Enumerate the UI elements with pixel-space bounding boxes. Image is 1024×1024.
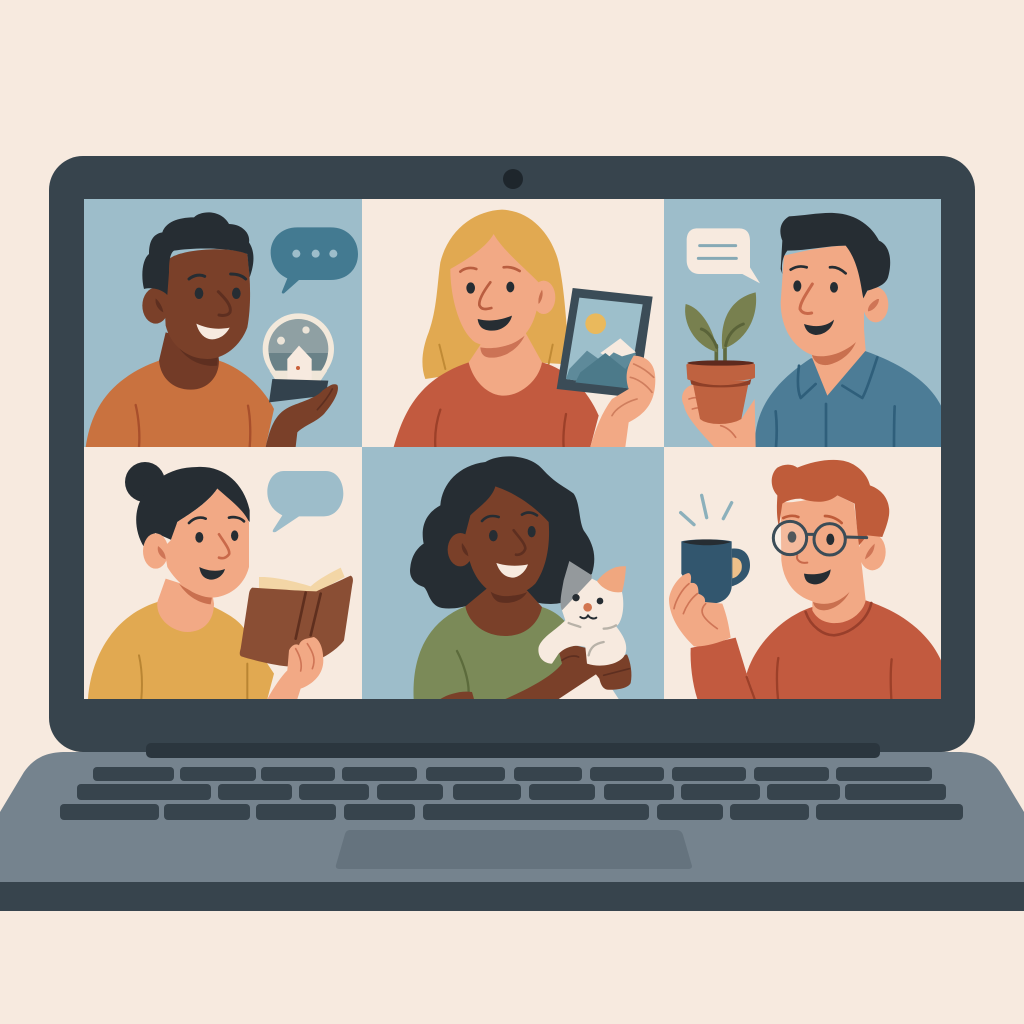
motion lines: [681, 495, 732, 525]
person 5: woman with cat: [410, 456, 631, 699]
face details: [791, 266, 846, 335]
face details: [783, 516, 842, 584]
mug: [681, 539, 750, 604]
potted plant: [685, 292, 756, 424]
keyboard: [60, 767, 963, 820]
face details: [189, 274, 246, 339]
ear: [863, 287, 888, 322]
person 4: woman with book: [88, 462, 353, 699]
neck: [157, 579, 214, 632]
shirt: [755, 351, 941, 447]
book: [240, 568, 353, 666]
cat lower body: [559, 664, 619, 699]
ear: [859, 534, 886, 570]
face details: [189, 517, 244, 580]
speech bubble: [687, 228, 760, 283]
face: [781, 246, 864, 356]
person 1: man with snow globe: [86, 212, 358, 447]
sweater: [86, 361, 274, 447]
front edge: [0, 882, 1024, 911]
long hair: [422, 210, 568, 379]
face: [450, 234, 539, 347]
trackpad: [336, 830, 692, 869]
ear: [143, 533, 168, 569]
hand: [590, 356, 655, 447]
sweater: [691, 600, 941, 699]
hair: [136, 467, 250, 547]
face: [781, 495, 862, 603]
arm and hand: [440, 645, 631, 699]
hair bun: [125, 462, 165, 502]
speech bubble: [267, 471, 343, 532]
neck: [812, 570, 866, 623]
webcam: [503, 169, 523, 189]
hinge: [146, 743, 880, 758]
laptop base: [0, 752, 1024, 911]
laptop lid: [49, 156, 975, 752]
face: [465, 486, 549, 596]
shirt lines: [776, 357, 895, 447]
speech bubble: [271, 227, 358, 293]
curly hair: [410, 456, 594, 608]
illustration: laptop video call: [0, 156, 1024, 911]
ear: [536, 280, 556, 314]
hair: [772, 460, 889, 545]
neck: [469, 332, 542, 396]
face: [164, 489, 249, 598]
hand: [266, 384, 338, 447]
ear: [448, 533, 473, 566]
person 3: man with plant: [682, 213, 941, 447]
cat: [538, 561, 626, 666]
neck: [159, 332, 219, 390]
picture frame: [557, 288, 653, 398]
screen: [84, 199, 941, 699]
ear: [142, 288, 166, 324]
hair: [780, 213, 890, 298]
sweater: [394, 362, 599, 447]
sweater collar: [806, 603, 871, 635]
hair: [142, 212, 253, 295]
snow globe: [263, 313, 334, 402]
person 6: man with glasses and mug: [669, 460, 941, 699]
sweater: [88, 602, 274, 699]
sweater: [413, 606, 575, 699]
person 2: blonde woman with framed picture: [394, 210, 655, 447]
hand: [669, 573, 731, 646]
neck: [465, 587, 542, 636]
face details: [460, 267, 520, 331]
hand: [267, 637, 323, 699]
face details: [482, 512, 537, 578]
neck: [811, 329, 866, 396]
face: [164, 249, 250, 359]
hand: [682, 384, 756, 447]
glasses: [773, 521, 867, 555]
